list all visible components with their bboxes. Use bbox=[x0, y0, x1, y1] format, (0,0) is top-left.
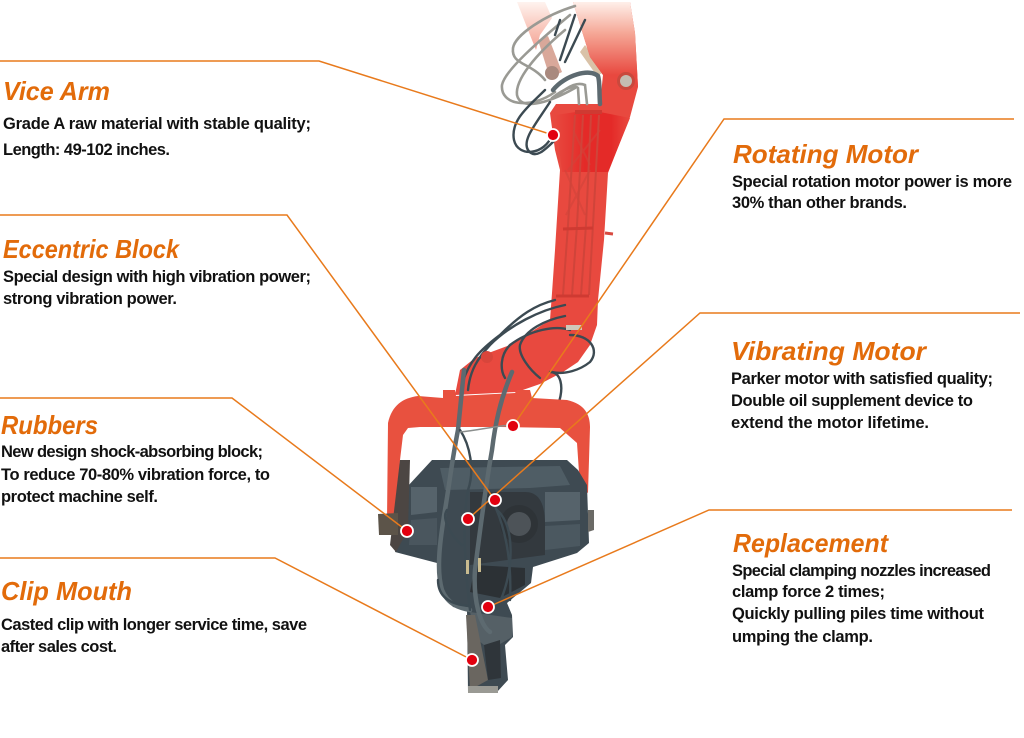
callout: Eccentric Block: Special design with high vibration power; bbox=[3, 268, 311, 286]
callout: Replacement: clamp force 2 times; bbox=[732, 583, 885, 601]
callout: Vice Arm: Vice Arm bbox=[3, 76, 110, 106]
callout: Replacement: Replacement bbox=[733, 528, 889, 558]
bracket: red frame bbox=[387, 390, 590, 527]
callout: Rubbers: To reduce 70-80% vibration force, to bbox=[1, 466, 270, 484]
callout: Clip Mouth: Casted clip with longer service time, save bbox=[1, 616, 307, 634]
callout: Vibrating Motor: Double oil supplement device to bbox=[731, 392, 973, 410]
callout: Rubbers: protect machine self. bbox=[1, 488, 158, 506]
vibrator body bbox=[378, 460, 594, 693]
arm shading and ribs bbox=[555, 72, 635, 296]
callout: Replacement: umping the clamp. bbox=[732, 628, 873, 646]
callout: Rotating Motor: Special rotation motor power is more bbox=[732, 173, 1012, 191]
callout: Clip Mouth: after sales cost. bbox=[1, 638, 117, 656]
callout: Eccentric Block bbox=[3, 234, 311, 308]
callout: Vibrating Motor bbox=[731, 336, 993, 432]
callout: Eccentric Block: strong vibration power. bbox=[3, 290, 177, 308]
callout: Vice Arm: Grade A raw material with stable quality; bbox=[3, 115, 311, 133]
callout: Vibrating Motor: Vibrating Motor bbox=[731, 336, 928, 366]
callout: Rotating Motor bbox=[732, 139, 1012, 212]
upper hoses bbox=[502, 6, 600, 154]
callout: Replacement bbox=[732, 528, 991, 646]
callout: Clip Mouth: Clip Mouth bbox=[1, 576, 132, 606]
callout: Vibrating Motor: Parker motor with satisfied quality; bbox=[731, 370, 993, 388]
callout: Replacement: Quickly pulling piles time without bbox=[732, 605, 984, 623]
callout: Vice Arm bbox=[3, 76, 311, 159]
callout: Rubbers: Rubbers bbox=[1, 410, 98, 440]
callout: Rubbers: New design shock-absorbing block; bbox=[1, 443, 263, 461]
callout: Replacement: Special clamping nozzles increased bbox=[732, 562, 991, 580]
upper arm pale pieces bbox=[517, 2, 604, 80]
marker dots bbox=[401, 129, 559, 666]
callout: Vibrating Motor: extend the motor lifetime. bbox=[731, 414, 929, 432]
body hoses bbox=[438, 370, 515, 632]
callout: Eccentric Block: Eccentric Block bbox=[3, 234, 180, 264]
callout: Clip Mouth bbox=[1, 576, 307, 656]
callout: Rotating Motor: Rotating Motor bbox=[733, 139, 920, 169]
machine illustration: vibro hammer attachment bbox=[378, 2, 638, 693]
callout: Rotating Motor: 30% than other brands. bbox=[732, 194, 907, 212]
neck hoses bbox=[462, 300, 594, 405]
callout: Rubbers bbox=[1, 410, 270, 506]
callout: Vice Arm: Length: 49-102 inches. bbox=[3, 141, 170, 159]
vice arm: red boom bbox=[455, 2, 638, 395]
